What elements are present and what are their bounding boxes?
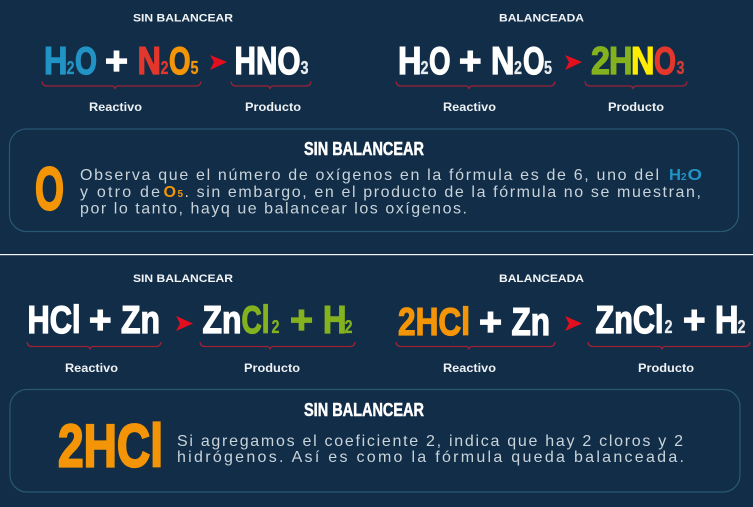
formula: 2HNO3: H <box>609 40 632 83</box>
formula: 2HCl + Zn: Zn <box>512 301 550 344</box>
panel: chlorine explanation <box>10 390 740 492</box>
brace: reactivo <box>396 342 555 350</box>
arrow <box>176 316 193 331</box>
formula: ZnCl2 + H2: 2 <box>272 317 280 337</box>
formula: H2O + N2O5: + <box>459 40 482 83</box>
formula: 2HNO3: O <box>654 40 676 83</box>
body text: H <box>669 167 681 184</box>
formula: H2O + N2O5: + <box>105 40 128 83</box>
section: first reaction sin balancear <box>42 12 311 114</box>
formula: H2O + N2O5: 2 <box>160 58 168 78</box>
body text: 5 <box>178 189 184 200</box>
formula: H2O + N2O5: O <box>169 40 190 83</box>
formula: 2HNO3: 2 <box>591 40 610 83</box>
section: second reaction sin balancear <box>27 273 355 375</box>
formula: H2O + N2O5: H <box>44 40 68 83</box>
formula: H2O + N2O5: 2 <box>514 58 522 78</box>
formula: HNO3: 3 <box>300 58 308 78</box>
formula: H2O + N2O5: O <box>523 40 544 83</box>
body text: 2 <box>681 172 687 183</box>
formula: 2HNO3 <box>591 40 684 83</box>
formula: ZnCl2 + H2: Zn <box>202 299 242 342</box>
formula: H2O + N2O5: 5 <box>190 58 198 78</box>
formula: H2O + N2O5: O <box>429 40 450 83</box>
label: producto: Producto <box>244 361 300 375</box>
formula: ZnCl2 + H2: H <box>715 299 738 342</box>
formula: H2O + N2O5 <box>44 40 198 83</box>
brace: reactivo <box>396 82 555 89</box>
section: first reaction balanceada <box>396 12 687 114</box>
brace: producto <box>588 342 750 350</box>
label: producto: Producto <box>608 100 664 114</box>
formula: 2HNO3: 3 <box>676 58 684 78</box>
brace: producto <box>585 82 687 89</box>
arrow <box>210 55 227 70</box>
brace: reactivo <box>42 82 201 89</box>
formula: H2O + N2O5: 2 <box>66 58 74 78</box>
body text: hidrógenos. Así es como la fórmula queda balanceada. <box>177 449 684 466</box>
formula: 2HCl + Zn <box>398 301 550 344</box>
formula: HCl + Zn: HCl <box>28 299 80 342</box>
formula: ZnCl2 + H2 <box>596 299 746 342</box>
formula: HCl + Zn: + <box>89 299 112 342</box>
heading: balanceada: BALANCEADA <box>499 273 584 285</box>
label: producto: Producto <box>638 361 694 375</box>
divider line <box>0 254 753 255</box>
formula: H2O + N2O5 <box>398 40 552 83</box>
body text: por lo tanto, hayq ue balancear los oxígenos. <box>80 200 467 218</box>
formula: ZnCl2 + H2: 2 <box>738 317 746 337</box>
formula: HCl + Zn: Zn <box>121 299 160 342</box>
label: producto: Producto <box>245 100 301 114</box>
brace: reactivo <box>27 342 161 350</box>
body text: Observa que el número de oxígenos en la fórmula es de 6, uno del <box>80 167 659 184</box>
brace: producto <box>200 342 355 350</box>
formula: H2O + N2O5: H <box>398 40 422 83</box>
body text: O <box>164 184 176 201</box>
formula: ZnCl2 + H2: Cl <box>242 299 270 342</box>
label: reactivo: Reactivo <box>65 361 118 375</box>
formula: 2HNO3: N <box>631 40 654 83</box>
body text: y otro de <box>80 184 160 201</box>
formula: HNO3: HNO <box>234 40 300 83</box>
formula: H2O + N2O5: N <box>138 40 161 83</box>
formula: 2HCl + Zn: 2HCl <box>398 301 470 344</box>
body text: Si agregamos el coeficiente 2, indica que hay 2 cloros y 2 <box>177 433 683 450</box>
section: second reaction balanceada <box>396 273 750 375</box>
formula: HCl + Zn <box>28 299 160 342</box>
formula: ZnCl2 + H2 <box>202 299 352 342</box>
body text: O <box>688 167 702 184</box>
body text <box>177 433 684 466</box>
formula: H2O + N2O5: 2 <box>420 58 428 78</box>
formula: H2O + N2O5: O <box>75 40 97 83</box>
formula: ZnCl2 + H2: 2 <box>664 317 672 337</box>
panel heading: SIN BALANCEAR <box>304 138 424 159</box>
formula: ZnCl2 + H2: ZnCl <box>596 299 664 342</box>
heading: balanceada: BALANCEADA <box>499 12 584 24</box>
big orange symbol: O <box>35 156 64 222</box>
label: reactivo: Reactivo <box>443 100 496 114</box>
formula: H2O + N2O5: 5 <box>544 58 552 78</box>
label: reactivo: Reactivo <box>89 100 142 114</box>
arrow <box>565 316 582 331</box>
formula: H2O + N2O5: N <box>491 40 514 83</box>
label: reactivo: Reactivo <box>443 361 496 375</box>
brace: producto <box>231 82 311 89</box>
big orange formula: 2HCl <box>58 412 163 480</box>
formula: 2HCl + Zn: + <box>479 301 502 344</box>
formula: ZnCl2 + H2: H <box>323 299 346 342</box>
formula: ZnCl2 + H2: + <box>683 299 706 342</box>
heading: sin balancear: SIN BALANCEAR <box>133 273 233 285</box>
formula: ZnCl2 + H2: + <box>290 299 313 342</box>
heading: sin balancear: SIN BALANCEAR <box>133 12 233 24</box>
body text <box>80 167 702 218</box>
panel heading: SIN BALANCEAR <box>304 399 424 420</box>
arrow <box>565 55 582 70</box>
panel: oxygen explanation <box>10 129 738 232</box>
formula: ZnCl2 + H2: 2 <box>344 317 352 337</box>
body text: . sin embargo, en el producto de la fórmula no se muestran, <box>184 184 701 201</box>
